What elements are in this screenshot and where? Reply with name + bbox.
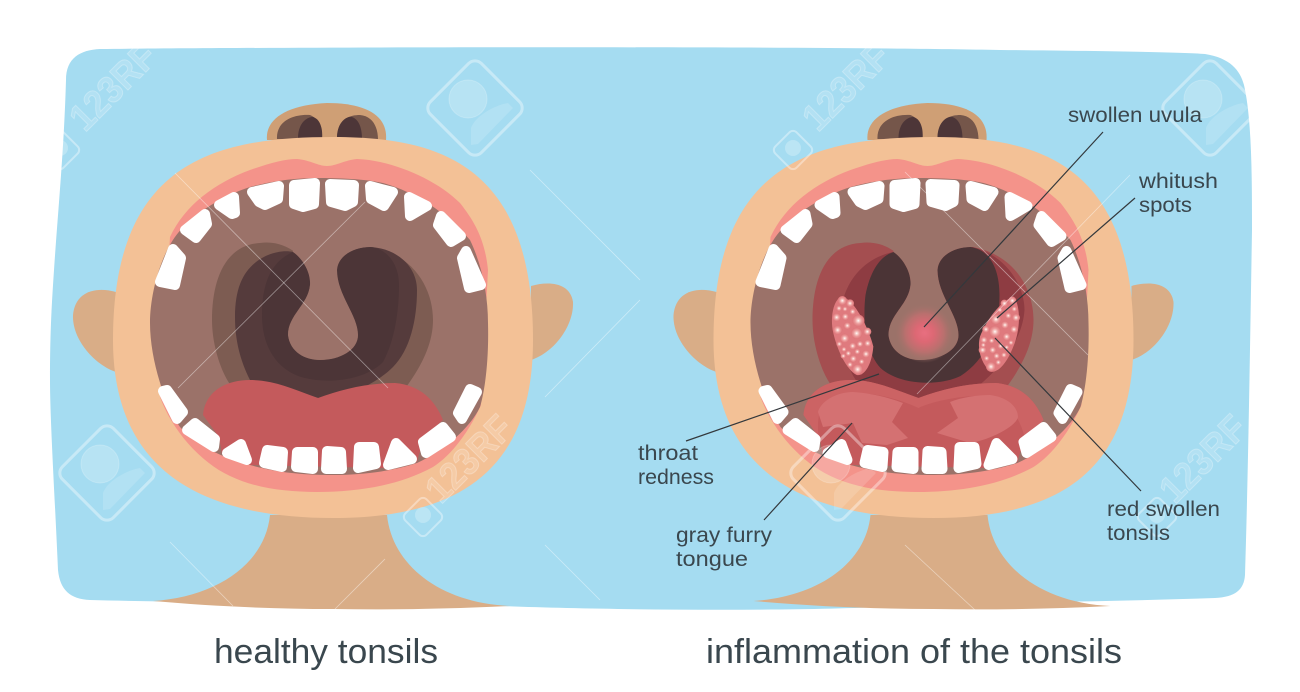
label: gray furry tongue: gray furry xyxy=(676,524,773,547)
lips xyxy=(760,159,1088,492)
leader line: red swollen tonsils xyxy=(995,338,1141,491)
tongue coating left xyxy=(818,392,908,445)
inner throat xyxy=(262,247,399,381)
label: whitush spots: spots xyxy=(1139,194,1192,217)
uvula swelling xyxy=(894,303,954,363)
label: gray furry tongue xyxy=(676,524,773,571)
face xyxy=(113,137,533,518)
neck xyxy=(754,515,1110,609)
uvula xyxy=(888,232,970,360)
leader line: throat redness xyxy=(686,374,879,441)
label: red swollen tonsils: tonsils xyxy=(1107,522,1170,545)
head: inflamed tonsils xyxy=(673,103,1174,609)
watermarks: 123RF xyxy=(62,35,166,139)
watermarks: 123RF xyxy=(418,407,522,511)
right tonsil spots xyxy=(979,297,1020,372)
leader line: gray furry tongue xyxy=(764,423,852,520)
throat opening xyxy=(235,247,417,398)
nose xyxy=(867,103,987,140)
label: red swollen tonsils: red swollen xyxy=(1107,498,1220,521)
tongue xyxy=(203,380,443,468)
background panel xyxy=(50,47,1252,610)
throat shading xyxy=(212,243,433,395)
leader line: whitish spots xyxy=(997,198,1135,318)
lips xyxy=(160,159,488,492)
face xyxy=(714,137,1134,518)
teeth xyxy=(760,183,1082,469)
teeth xyxy=(160,183,481,469)
label: throat redness: throat xyxy=(638,442,698,465)
label: throat redness: redness xyxy=(638,466,714,489)
mouth cavity xyxy=(150,178,488,475)
ears xyxy=(673,283,1174,372)
red tongue xyxy=(804,380,1044,468)
label: whitush spots xyxy=(1138,170,1218,217)
head: healthy tonsils xyxy=(73,103,573,609)
uvula xyxy=(288,232,370,360)
throat opening xyxy=(864,247,1000,383)
watermarks: 123RF xyxy=(1152,407,1256,511)
nose xyxy=(267,103,386,140)
ears xyxy=(73,283,573,372)
neck xyxy=(153,515,510,609)
leader line: swollen uvula xyxy=(924,132,1103,327)
label: swollen uvula: swollen uvula xyxy=(1068,104,1202,127)
label: gray furry tongue: tongue xyxy=(676,548,748,571)
mouth cavity xyxy=(750,178,1089,475)
watermarks xyxy=(39,35,1261,538)
caption: healthy tonsils: healthy tonsils xyxy=(214,633,438,671)
darker red throat xyxy=(840,247,1024,402)
label: whitush spots: whitush xyxy=(1138,170,1218,193)
tongue coating right xyxy=(937,395,1018,443)
tongue edge xyxy=(804,380,1044,440)
label: throat redness xyxy=(638,442,714,489)
red throat xyxy=(812,243,1034,395)
label: red swollen tonsils xyxy=(1107,498,1220,545)
watermarks: 123RF xyxy=(795,35,899,139)
left tonsil spots xyxy=(832,296,873,375)
caption: inflammation of the tonsils: inflammation of the tonsils xyxy=(706,633,1122,671)
